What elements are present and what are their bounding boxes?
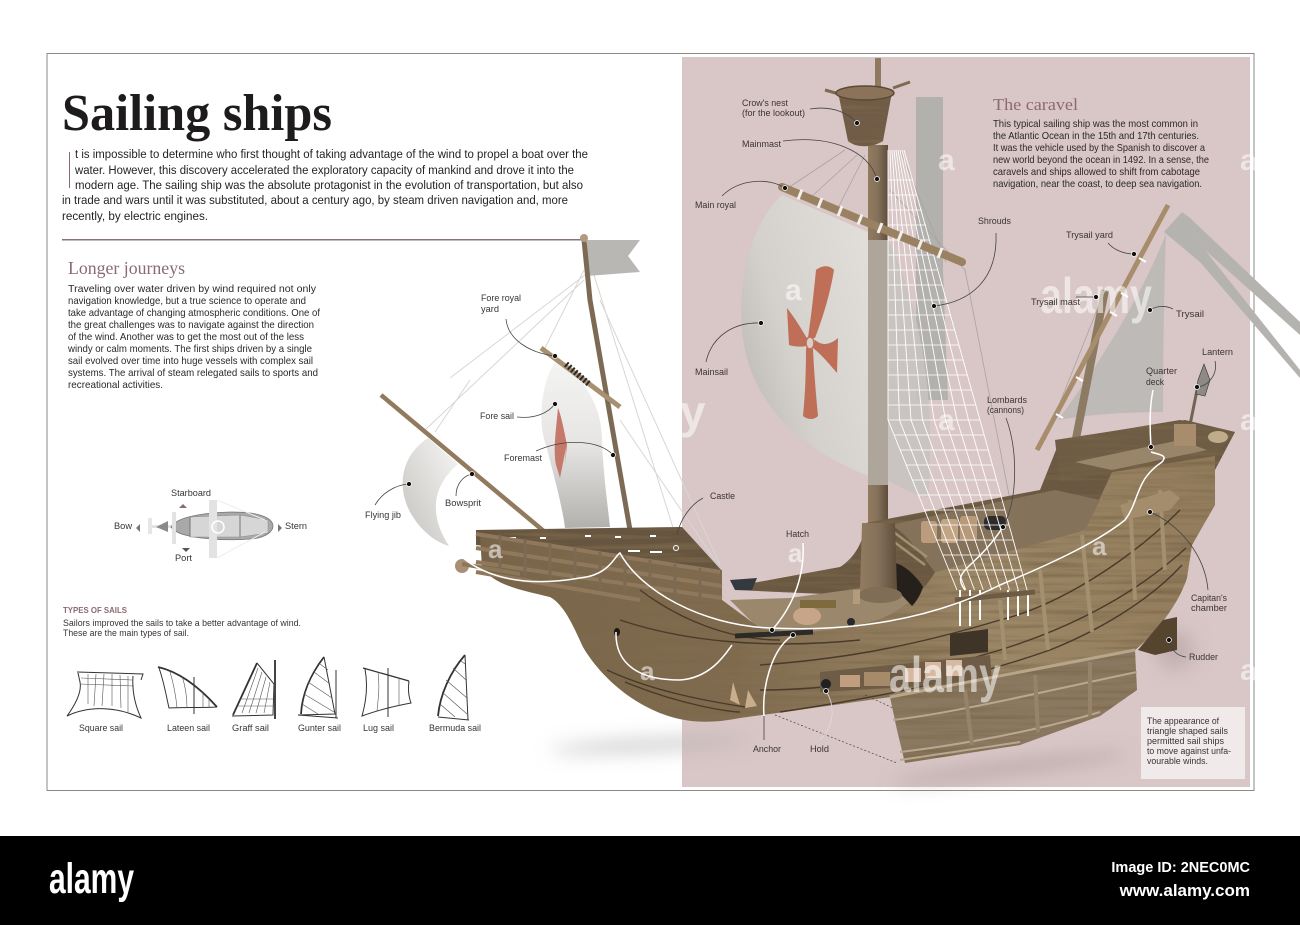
intro text block: in trade and wars until it was substituted, about a century ago, by steam driven navigation and, more [62,193,568,207]
text block: The caravel: It was the vehicle used by the Spanish to discover a [993,142,1205,154]
callout: triangle sails note: triangle shaped sails [1147,726,1228,736]
label: Mainmast: Mainmast [742,139,781,149]
callout: triangle sails note: to move against unfa- [1147,746,1231,756]
callout: triangle sails note: The appearance of [1147,716,1219,726]
fore mast and flag [580,234,640,530]
text block: The caravel: the Atlantic Ocean in the 15th and 17th centuries. [993,130,1199,142]
icon: gunter sail: Gunter sail [298,723,341,733]
label: Mainmast [742,139,880,182]
mainsail [741,195,868,476]
ship shadows [550,630,1195,788]
watermarks: alamy [889,647,1001,703]
trysail [1058,234,1166,420]
label: Lombards (cannons): Lombards [987,395,1027,405]
label: Capitan's chamber: Capitan's [1191,593,1227,603]
watermarks: a [1092,531,1107,561]
watermarks: a [1240,144,1257,177]
text block: The caravel: new world beyond the ocean in 1492. In a sense, the [993,154,1209,166]
far trysail pennant [1164,212,1300,378]
footer bar: Image ID: 2NEC0MC [1111,860,1251,876]
watermarks: a [640,656,655,686]
label: Crow's nest: (for the lookout) [742,108,805,118]
label: Stern: Stern [285,521,307,531]
text block: Types of sails: These are the main types of sail. [63,628,189,638]
text block: Longer journeys: the great challenges was to navigate against the direction [68,319,314,331]
label: Fore royal yard [481,293,558,358]
label: Castle [674,491,735,550]
label: Starboard: Starboard [171,488,211,498]
dashed link lower [865,695,893,708]
label: Castle: Castle [710,491,735,501]
white leader lines across hull [452,452,1164,680]
label: Flying jib: Flying jib [365,510,401,520]
watermarks: a [938,144,955,177]
label: Shrouds: Shrouds [978,216,1011,226]
label: Main royal [695,181,788,210]
dark arch under half deck [895,563,923,606]
mainsail, right part behind the shrouds [888,240,930,497]
barrels [921,516,1006,543]
label: Bowsprit: Bowsprit [445,498,482,508]
watermarks: a [788,538,803,568]
text block: Longer journeys: Traveling over water driven by wind required not only [68,283,317,295]
main royal yard [782,187,962,262]
label: Trysail yard: Trysail yard [1066,230,1113,240]
text block: The caravel: This typical sailing ship was the most common in [993,118,1198,130]
label: Quarter deck: Quarter [1146,366,1177,376]
label: Foremast [504,442,616,463]
watermarks: a [488,534,503,564]
heading: The caravel: The caravel [993,95,1078,114]
label: Trysail mast [1031,294,1098,307]
text block: Types of sails: Sailors improved the sails to take a better advantage of wind. [63,618,301,628]
dashed link [775,715,897,763]
fore royal yard [541,348,620,407]
lantern [1190,364,1210,425]
illustration: caravel [381,58,1300,763]
icon: lateen sail: Lateen sail [167,723,210,733]
label: Trysail yard [1066,230,1136,256]
forecastle back wall [476,527,722,571]
text block: Types of sails [63,618,301,638]
intro text block [62,147,588,223]
label: Fore sail: Fore sail [480,411,514,421]
label: Lantern [1194,347,1233,390]
label: Fore royal yard: yard [481,304,499,314]
watermarks: a [1240,404,1257,437]
label: Quarter deck [1146,366,1177,450]
rudder [1138,617,1177,655]
label: Capitan's chamber [1148,510,1227,613]
hull: inner walls [735,420,1235,600]
watermarks [488,144,1257,703]
text block: Longer journeys: systems. The arrival of steam relegated sails to sports and [68,367,318,379]
detached hull section [890,650,1137,763]
label: Bow: Bow [114,521,133,531]
label: Hatch [770,529,809,632]
text block: Longer journeys: windy or calm moments. The first ships driven by a single [67,343,312,355]
label: Rudder: Rudder [1189,652,1218,662]
label: Starboard [171,488,211,508]
half deck [890,490,1100,572]
text block: Longer journeys: of the wind. Another was to get the most out of the less [68,331,304,343]
text block: Longer journeys: sail evolved over time into huge vessels with complex sail [68,355,313,367]
icon: bermuda sail: Bermuda sail [429,723,481,733]
intro text block: water. However, this discovery accelerated the exploratory capacity of mankind and drove it into the [74,163,574,177]
label: Anchor: Anchor [753,744,781,754]
label: Rudder [1166,638,1218,662]
forecastle rails [455,534,722,600]
watermarks: y [680,386,706,438]
top-view ship diagram [148,500,273,558]
watermarks: alamy [1040,268,1152,324]
icon: graff sail: Graff sail [232,723,269,733]
rigging [785,150,1105,500]
label: Capitan's chamber: chamber [1191,603,1227,613]
flying jib [403,438,458,546]
label: Main royal: Main royal [695,200,736,210]
callout: triangle sails note [1141,707,1245,779]
icon: lug sail [362,668,411,733]
shrouds net [888,150,1035,626]
label: Port [175,548,193,563]
label: Hatch: Hatch [786,529,809,539]
label: Trysail [1148,306,1204,319]
icon: gunter sail [298,657,341,733]
intro text block: recently, by electric engines. [62,209,208,223]
icon: lateen sail [158,667,217,733]
label: Quarter deck: deck [1146,377,1164,387]
label: Lombards (cannons): (cannons) [987,405,1024,415]
label: Shrouds [932,216,1011,308]
label: Lombards (cannons) [987,395,1027,530]
icon: graff sail [232,660,275,733]
label: Mainsail: Mainsail [695,367,728,377]
quarter deck [1055,420,1235,482]
intro text block: t is impossible to determine who first thought of taking advantage of the wind to propel a boat over the [75,147,588,161]
text block: The caravel: caravels and ships allowed to shift from cabotage [993,166,1200,178]
mainsail cross [787,266,838,419]
label: Stern [278,521,307,532]
hull: wales and planks [607,510,1186,712]
half-deck rail [885,527,927,565]
crow's nest [825,82,910,146]
callout: triangle sails note: permitted sail ships [1147,736,1224,746]
label: Fore sail [480,402,558,421]
label: Fore royal yard: Fore royal [481,293,521,303]
label: Crow's nest: Crow's nest [742,98,788,108]
grey background sail [916,97,948,400]
heading: Longer journeys: Longer journeys [68,258,185,278]
label: Hold: Hold [810,744,829,754]
text block: Longer journeys: navigation knowledge, but a true science to operate and [68,295,306,307]
text block: Longer journeys: recreational activities. [68,379,163,391]
label: Crow's nest [742,98,860,126]
text block: The caravel [993,118,1209,190]
trysail yard [1037,205,1168,450]
panel: caravel background [682,57,1250,787]
text block: The caravel: navigation, near the coast, to deep sea navigation. [993,178,1202,190]
title: Sailing ships [62,85,332,142]
label: Port: Port [175,553,193,563]
infographic frame [47,54,1254,790]
label: Mainsail [695,320,764,377]
label: Bow [114,521,140,532]
watermarks: a [785,274,802,307]
label: Bowsprit [445,472,482,508]
label: Lantern: Lantern [1202,347,1233,357]
label: Anchor [753,632,796,754]
footer bar [0,836,1300,925]
icon: lug sail: Lug sail [363,723,394,733]
watermarks: a [938,404,955,437]
watermarks: a [1240,654,1257,687]
label: Flying jib [365,482,412,520]
label: Trysail: Trysail [1176,309,1204,319]
hold [820,629,992,692]
bowsprit [381,395,558,543]
label: Hold [810,688,832,754]
hull: waist deck [730,588,915,636]
deck cargo [730,578,860,636]
label: Foremast: Foremast [504,453,542,463]
footer bar: alamy [49,855,134,903]
hull: main body [480,455,1215,722]
fore sail [541,362,610,528]
text block: Longer journeys [67,283,320,391]
main mast base [858,523,902,603]
footer bar: www.alamy.com [1119,881,1250,900]
trysail mast [1065,290,1105,495]
main mast [868,58,888,535]
text block: Longer journeys: take advantage of changing atmospheric conditions. One of [68,307,320,319]
intro text block: modern age. The sailing ship was the absolute protagonist in the evolution of transportation, but also [75,178,583,192]
label: Trysail mast: Trysail mast [1031,297,1081,307]
icon: square sail [67,672,143,733]
icon: bermuda sail [429,655,481,733]
callout: triangle sails note: vourable winds. [1147,756,1208,766]
icon: square sail: Square sail [79,723,123,733]
stern chamber [1120,490,1180,520]
heading: Types of sails: TYPES OF SAILS [63,605,127,615]
